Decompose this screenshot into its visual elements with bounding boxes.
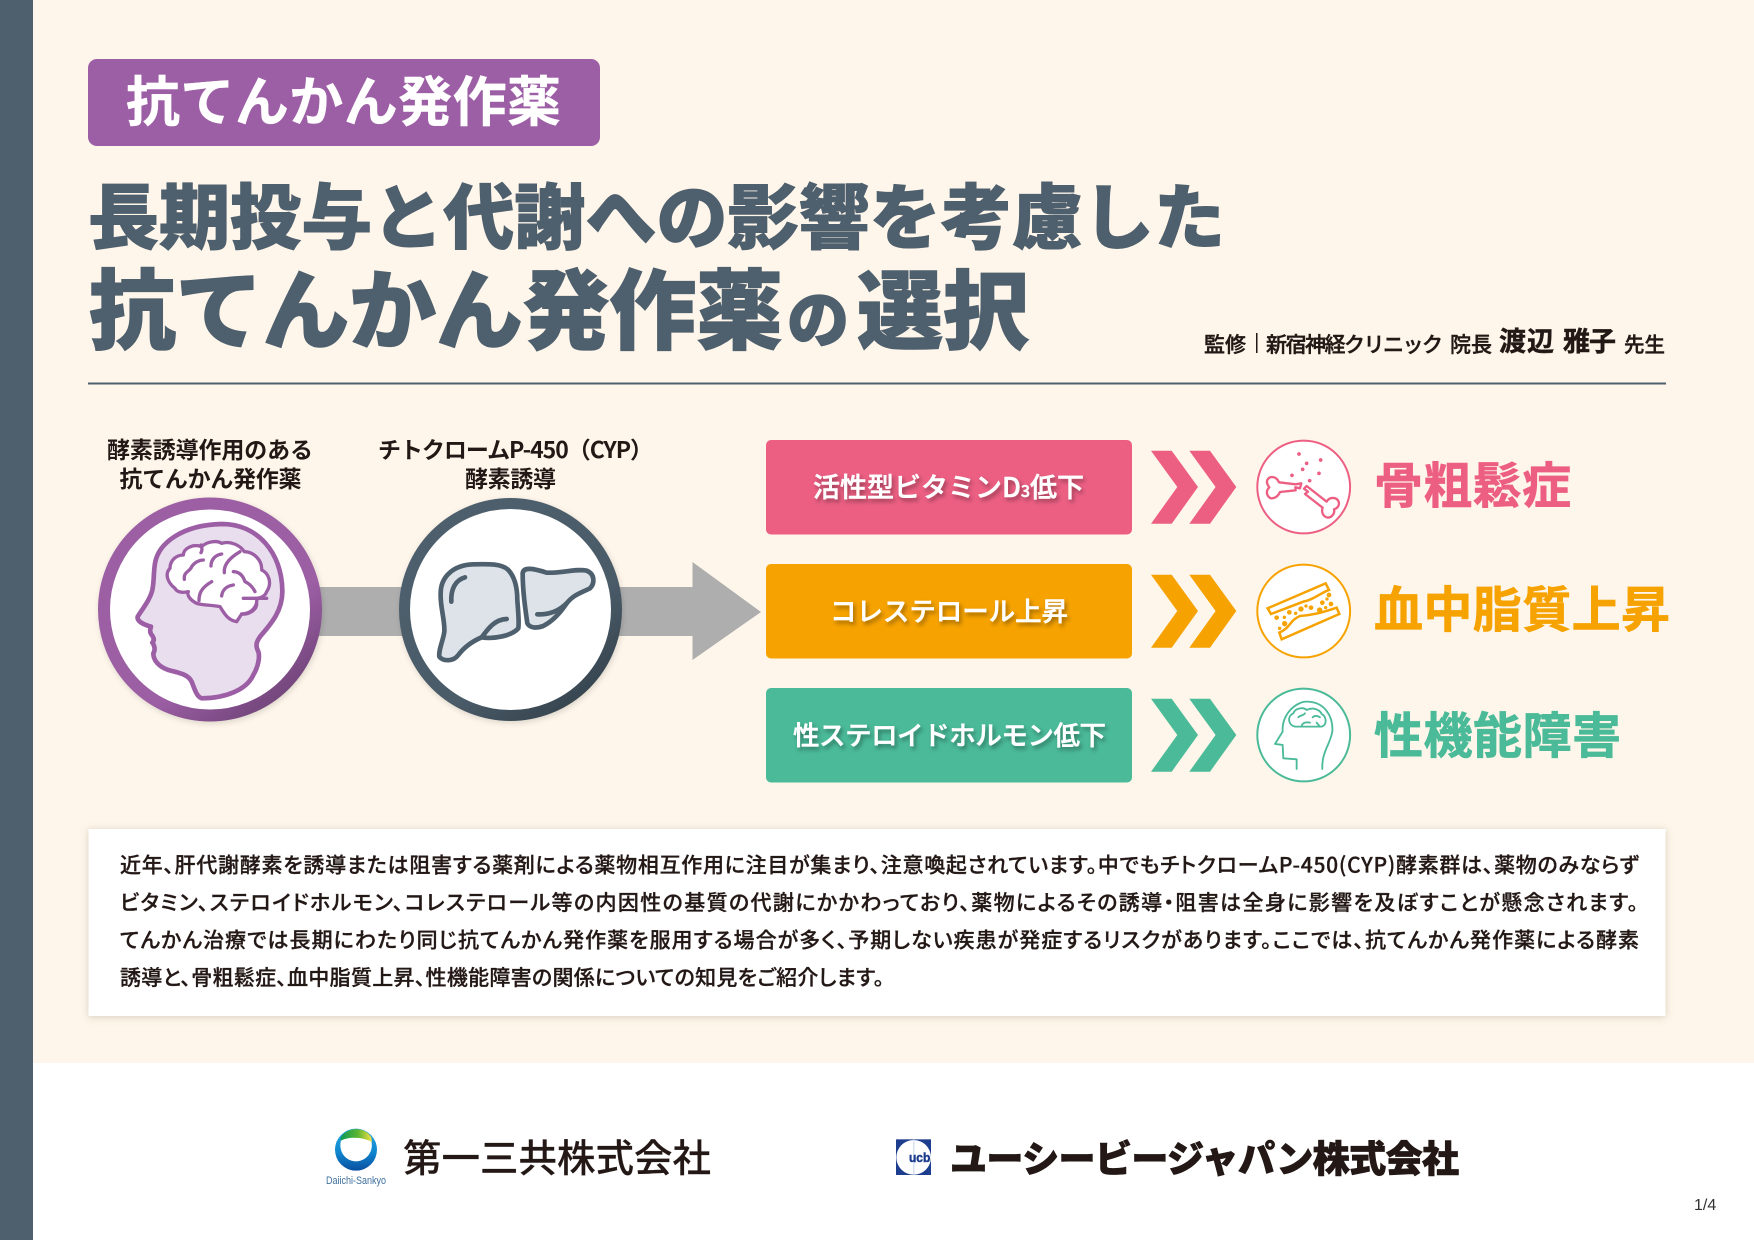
icon: clogged vessel <box>1257 565 1350 657</box>
intro text panel: ビタミン、ステロイドホルモン、コレステロール等の内因性の基質の代謝にかかわっており、薬物によるその誘導・阻害は全身に影響を及ぼすことが懸念されます。 <box>120 887 1638 917</box>
label: CYP induction: チトクロームP-450（CYP） <box>378 431 653 465</box>
icon: liver <box>404 504 616 716</box>
title: 選択 <box>857 242 1029 367</box>
intro text panel: てんかん治療では長期にわたり同じ抗てんかん発作薬を服用する場合が多く、予期しない疾患が発症するリスクがあります。ここでは、抗てんかん発作薬による酵素 <box>120 924 1639 954</box>
term: sexual dysfunction: 性機能障害 <box>1374 697 1621 768</box>
row: sex steroid to sexual dysfunction <box>766 688 1621 782</box>
arrow: drug to effects <box>315 562 761 660</box>
intro text panel: 近年、肝代謝酵素を誘導または阻害する薬剤による薬物相互作用に注目が集まり、注意喚起されています。中でもチトクロームP-450(CYP)酵素群は、薬物のみならず <box>120 850 1639 880</box>
chevrons <box>1151 451 1236 524</box>
box: sex steroid decrease <box>766 688 1132 782</box>
term: osteoporosis: 骨粗鬆症 <box>1374 447 1571 518</box>
row: cholesterol to blood lipid rise <box>766 564 1670 658</box>
supervisor credit: 雅子 <box>1563 320 1616 359</box>
box: sex steroid decrease: 性ステロイドホルモン低下 <box>793 714 1106 753</box>
icon: head with brain <box>104 504 316 716</box>
intro text panel <box>88 829 1666 1016</box>
logo: UCB Japan: ユーシービージャパン株式会社 <box>950 1129 1459 1183</box>
icon: head outline with brain <box>1257 689 1350 781</box>
left side bar <box>0 0 33 1240</box>
box: cholesterol rise <box>766 564 1132 658</box>
supervisor credit <box>1204 320 1665 359</box>
logo: UCB Japan: ucb <box>909 1150 930 1165</box>
label: CYP induction: 酵素誘導 <box>465 460 556 494</box>
page number: 1/4 <box>1694 1197 1716 1214</box>
supervisor credit: 院長 <box>1450 329 1492 359</box>
logo: Daiichi-Sankyo: Daiichi-Sankyo <box>326 1175 386 1187</box>
term: blood lipid rise: 血中脂質上昇 <box>1374 571 1670 642</box>
label: CYP induction <box>378 431 653 494</box>
row: vitamin D to osteoporosis <box>766 440 1571 534</box>
chevrons <box>1151 575 1236 648</box>
label: enzyme-inducing drugs <box>107 431 313 494</box>
supervisor credit: 先生 <box>1624 328 1665 358</box>
title: の <box>787 270 849 360</box>
supervisor credit: 渡辺 <box>1499 320 1554 359</box>
title: 長期投与と代謝への影響を考慮した <box>88 162 1225 264</box>
supervisor credit: 監修 <box>1204 329 1246 359</box>
icon: broken bone <box>1257 441 1350 533</box>
box: vitamin D decrease: 活性型ビタミンD3低下 <box>813 466 1084 505</box>
title: 抗てんかん発作薬 <box>89 242 783 368</box>
label: enzyme-inducing drugs: 酵素誘導作用のある <box>107 431 313 465</box>
supervisor credit: 新宿神経クリニック <box>1266 329 1443 359</box>
label: enzyme-inducing drugs: 抗てんかん発作薬 <box>120 460 302 494</box>
category badge: 抗てんかん発作薬 <box>126 58 561 137</box>
chevrons <box>1151 699 1236 772</box>
box: cholesterol rise: コレステロール上昇 <box>830 590 1068 629</box>
logo: Daiichi-Sankyo: 第一三共株式会社 <box>403 1128 711 1184</box>
title <box>88 162 1225 368</box>
box: vitamin D decrease <box>766 440 1132 534</box>
intro text panel: 誘導と、骨粗鬆症、血中脂質上昇、性機能障害の関係についての知見をご紹介します。 <box>120 962 884 992</box>
